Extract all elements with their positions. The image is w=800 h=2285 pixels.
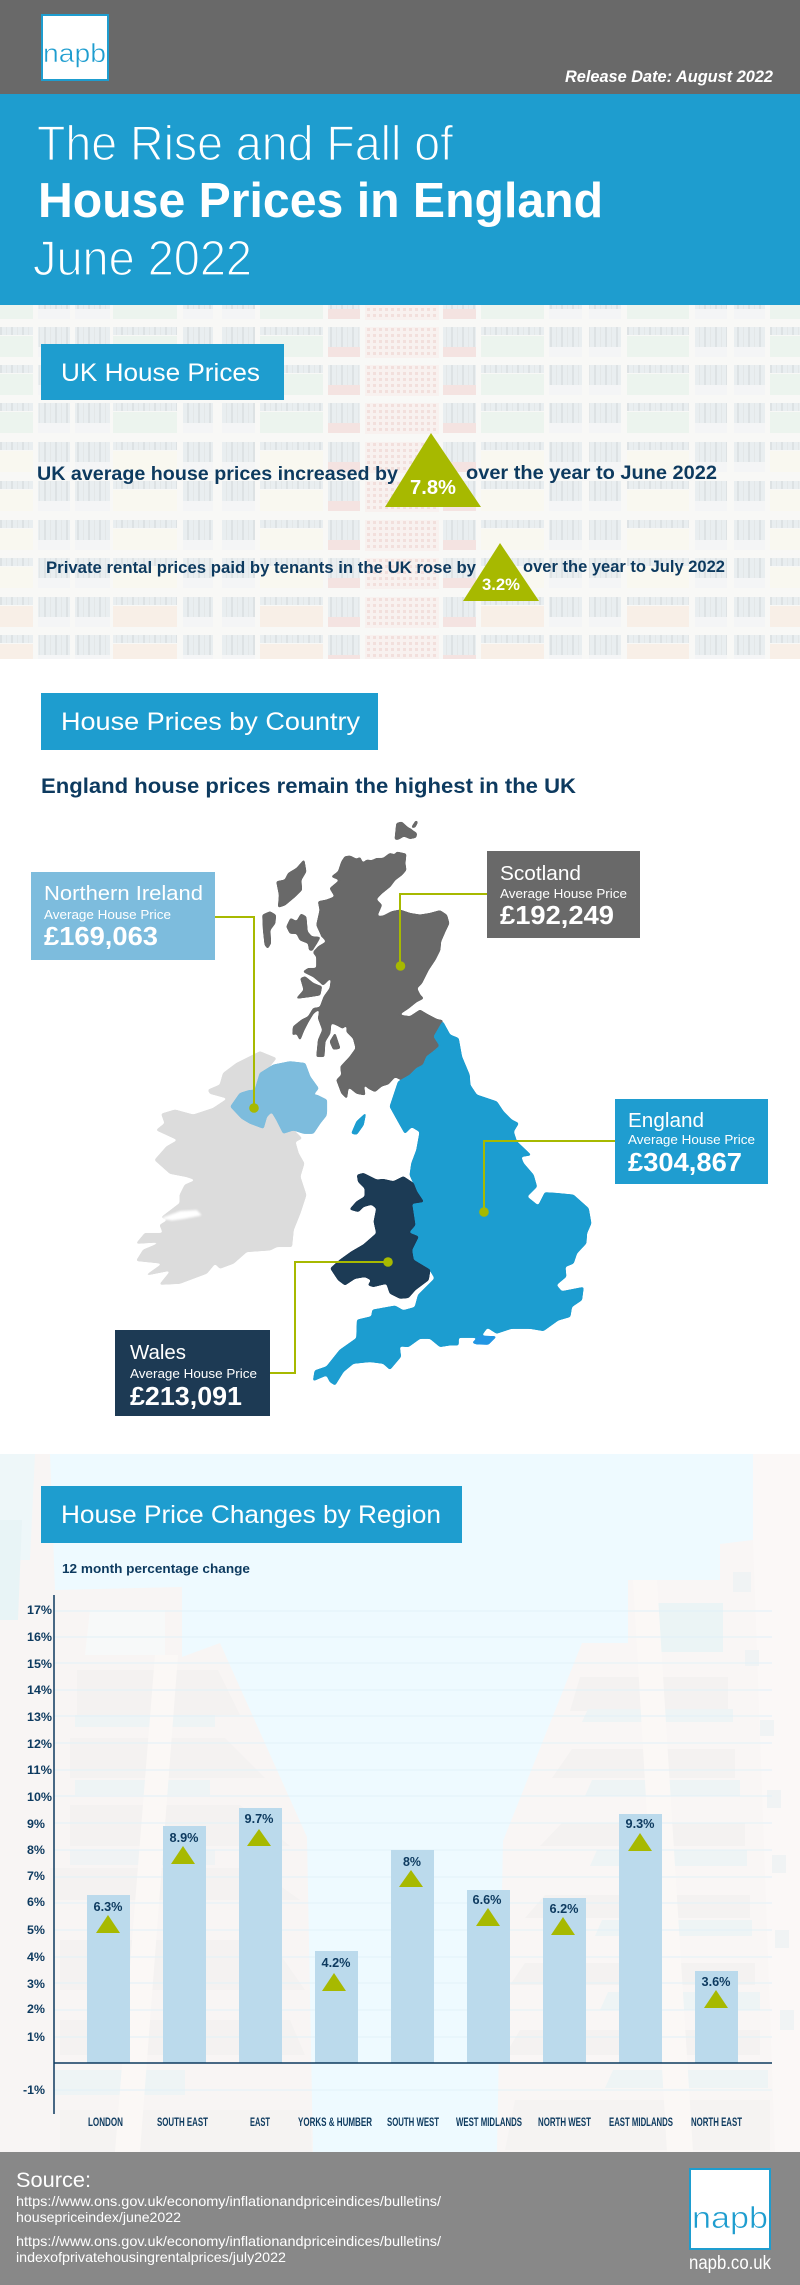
y axis labels: 10% <box>27 1790 52 1804</box>
y axis labels: 6% <box>27 1895 45 1909</box>
axes <box>54 1595 772 2114</box>
title block: June 2022 <box>33 232 252 286</box>
bar: South East <box>163 1826 206 2063</box>
footer logo: napb <box>692 2200 768 2235</box>
map of UK and Ireland <box>137 821 591 1385</box>
title block <box>0 94 800 305</box>
panel: house price changes by region <box>0 1454 800 2152</box>
bar: London <box>87 1895 130 2063</box>
callout: England: England <box>628 1110 704 1132</box>
callout: Scotland <box>396 851 640 971</box>
y axis labels: 12% <box>27 1737 52 1751</box>
heading: House Prices by Country <box>41 693 378 750</box>
callout: England <box>479 1099 768 1217</box>
x axis labels: EAST <box>250 2117 270 2129</box>
bar: Yorks & Humber: 4.2% <box>322 1955 351 1970</box>
callout: Northern Ireland: Northern Ireland <box>44 883 203 905</box>
y axis labels: 1% <box>27 2030 45 2044</box>
x axis labels: SOUTH EAST <box>157 2117 208 2129</box>
bar: Yorks & Humber <box>315 1951 358 2063</box>
callout: Wales <box>115 1257 393 1416</box>
map region: Scotland <box>263 821 449 1098</box>
y axis labels: 16% <box>27 1630 52 1644</box>
y axis labels: 5% <box>27 1923 45 1937</box>
bar: North East <box>695 1971 738 2063</box>
statement: average house prices: UK average house prices increased by <box>37 463 398 485</box>
map region: Wales <box>331 1173 430 1298</box>
source list: Source: <box>16 2169 91 2192</box>
bar: East Midlands: 9.3% <box>626 1816 655 1831</box>
y axis labels: 11% <box>27 1763 52 1777</box>
map region: Ireland <box>137 1052 306 1284</box>
x axis labels <box>88 2117 742 2129</box>
y axis labels: 4% <box>27 1950 45 1964</box>
chart note: 12 month percentage change <box>62 1561 250 1576</box>
footer logo <box>690 2169 770 2249</box>
callout: Scotland: Average House Price <box>500 886 627 901</box>
title block: House Prices in England <box>38 174 603 228</box>
heading: House Price Changes by Region: House Price Changes by Region <box>61 1501 441 1529</box>
callout: Scotland: Scotland <box>500 863 581 885</box>
background: sky and tower blocks <box>0 1454 800 2152</box>
source list: housepriceindex/june2022 <box>16 2209 181 2225</box>
map region: England <box>313 1022 591 1385</box>
source list: https://www.ons.gov.uk/economy/inflationandpriceindices/bulletins/ <box>16 2233 441 2249</box>
heading: House Prices by Country: House Prices by Country <box>61 708 361 736</box>
bar: North West: 6.2% <box>550 1901 579 1916</box>
callout: Scotland: £192,249 <box>500 900 614 930</box>
bar: West Midlands <box>467 1890 510 2063</box>
bar: North East: 3.6% <box>702 1974 731 1989</box>
heading: UK House Prices: UK House Prices <box>61 359 260 387</box>
callout: Wales: Wales <box>130 1342 186 1364</box>
callout: Northern Ireland: Average House Price <box>44 907 171 922</box>
callout: England: Average House Price <box>628 1132 755 1147</box>
title block: The Rise and Fall of <box>37 117 453 171</box>
bar: South West: 8% <box>403 1854 421 1869</box>
footer <box>0 2152 800 2285</box>
source list: indexofprivatehousingrentalprices/july2022 <box>16 2249 286 2265</box>
statement: private rental prices <box>46 543 725 601</box>
y axis labels <box>23 1603 52 2097</box>
statement: average house prices: over the year to June 2022 <box>466 462 717 484</box>
bar: East <box>239 1808 282 2063</box>
source list <box>16 2169 441 2265</box>
callout: England: £304,867 <box>628 1147 742 1177</box>
x axis labels: YORKS & HUMBER <box>298 2117 372 2129</box>
bar: West Midlands: 6.6% <box>472 1892 502 1907</box>
x axis labels: NORTH WEST <box>538 2117 591 2129</box>
y axis labels: -1% <box>23 2083 45 2097</box>
x axis labels: LONDON <box>88 2117 123 2129</box>
callout: Northern Ireland: £169,063 <box>44 921 158 951</box>
source list: https://www.ons.gov.uk/economy/inflationandpriceindices/bulletins/ <box>16 2193 441 2209</box>
y axis labels: 3% <box>27 1977 45 1991</box>
map region: Northern Ireland <box>231 1062 327 1133</box>
x axis labels: SOUTH WEST <box>387 2117 439 2129</box>
y axis labels: 8% <box>27 1843 45 1857</box>
subheading: England house prices remain the highest in the UK <box>41 775 576 798</box>
logo: napb <box>42 15 108 80</box>
y axis labels: 15% <box>27 1657 52 1671</box>
background: apartment block facade <box>0 289 800 666</box>
bar: London: 6.3% <box>94 1899 123 1914</box>
statement: average house prices <box>37 433 717 507</box>
statement: average house prices: 7.8% <box>410 477 456 499</box>
bar: South East: 8.9% <box>170 1830 199 1845</box>
y axis labels: 7% <box>27 1869 45 1883</box>
bar: East Midlands <box>619 1814 662 2063</box>
release date: Release Date: August 2022 <box>565 68 773 86</box>
gridlines <box>54 1611 772 2090</box>
heading: UK House Prices <box>41 344 284 400</box>
bar: East: 9.7% <box>244 1811 274 1826</box>
logo: napb: napb <box>43 38 106 68</box>
bar: North West <box>543 1898 586 2063</box>
y axis labels: 13% <box>27 1710 52 1724</box>
x axis labels: WEST MIDLANDS <box>456 2117 522 2129</box>
bar chart <box>23 1595 772 2129</box>
statement: private rental prices: 3.2% <box>482 575 520 594</box>
x axis labels: NORTH EAST <box>691 2117 742 2129</box>
panel: UK house prices <box>0 289 800 666</box>
statement: private rental prices: over the year to July 2022 <box>523 558 725 576</box>
header band <box>0 0 800 94</box>
y axis labels: 2% <box>27 2002 45 2016</box>
x axis labels: EAST MIDLANDS <box>609 2117 673 2129</box>
statement: private rental prices: Private rental prices paid by tenants in the UK rose by <box>46 559 477 577</box>
callout: Wales: £213,091 <box>130 1381 242 1411</box>
callout: Northern Ireland <box>31 872 259 1113</box>
heading: House Price Changes by Region <box>41 1486 462 1543</box>
y axis labels: 14% <box>27 1683 52 1697</box>
website: napb.co.uk <box>689 2253 771 2274</box>
y axis labels: 9% <box>27 1817 45 1831</box>
bar: South West <box>391 1850 434 2063</box>
y axis labels: 17% <box>27 1603 52 1617</box>
callout: Wales: Average House Price <box>130 1366 257 1381</box>
